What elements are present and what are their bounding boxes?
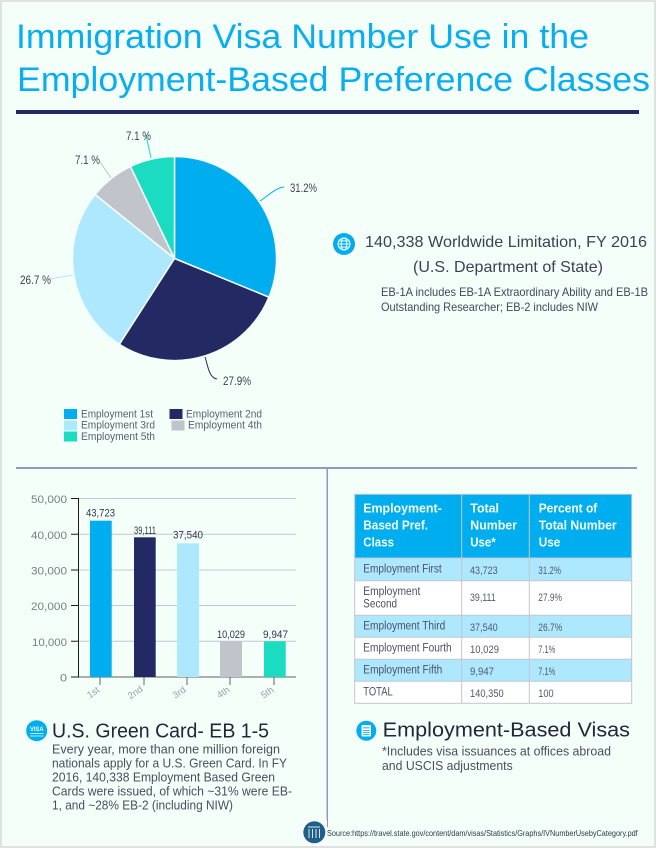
pie legend: [64, 408, 262, 443]
y axis labels: 50,000: [31, 494, 67, 506]
title: Employment-Based Preference Classes: [17, 61, 650, 99]
pie legend: Employment 3rd: [81, 420, 155, 432]
title: [16, 18, 650, 99]
table number column: 140,350: [470, 688, 504, 700]
y axis labels: [31, 494, 67, 684]
y axis labels: 20,000: [31, 601, 67, 613]
pie legend: Employment 5th: [81, 431, 155, 443]
table header: [355, 494, 632, 558]
slice: Employment 1st 31.2%: [174, 156, 277, 297]
pie value labels: 31.2%: [290, 181, 317, 195]
pie value labels: 27.9%: [223, 374, 251, 388]
gridlines and axes: [71, 498, 296, 685]
icon: visa card: [26, 720, 47, 741]
table class column: TOTAL: [363, 687, 393, 699]
table class column: Employment: [363, 586, 421, 598]
visas footnote: and USCIS adjustments: [382, 759, 513, 773]
visas footnote: [382, 745, 611, 773]
table header: Based Pref.: [363, 519, 428, 533]
icon: document: [356, 721, 376, 741]
table header: Total Number: [539, 519, 617, 533]
y axis labels: 30,000: [31, 566, 67, 578]
worldwide limitation heading: 140,338 Worldwide Limitation, FY 2016: [365, 234, 647, 251]
slice: Employment 2nd 27.9%: [119, 258, 269, 361]
slice: Employment 5th 7.1%: [130, 156, 174, 258]
bar value labels: 43,723: [86, 508, 115, 520]
green card body text: 1, and ~28% EB-2 (including NIW): [52, 798, 233, 812]
table class column: [363, 564, 452, 699]
bar chart: [31, 494, 296, 702]
x axis labels: 1st: [85, 685, 102, 701]
x axis labels: 5th: [259, 685, 276, 701]
worldwide limitation heading: (U.S. Department of State): [413, 259, 603, 276]
bars: [90, 521, 286, 677]
y axis labels: 0: [60, 672, 67, 684]
visas footnote: *Includes visa issuances at offices abroad: [382, 745, 611, 759]
x axis labels: 4th: [215, 685, 232, 701]
icon: globe: [332, 232, 356, 256]
table number column: 39,111: [470, 592, 496, 604]
slice: Employment 3rd 26.7%: [73, 194, 174, 344]
bar value labels: 39,111: [134, 525, 156, 537]
data table: [355, 494, 632, 703]
green card body text: Every year, more than one million foreign: [52, 742, 280, 756]
employment-based visas heading: Employment-Based Visas: [383, 720, 630, 742]
slice: Employment 4th 7.1%: [95, 166, 174, 258]
table header: Employment-: [363, 502, 442, 516]
pie value labels: 7.1 %: [75, 153, 100, 167]
table number column: 9,947: [470, 666, 494, 678]
table header: Total: [470, 502, 499, 516]
pie value labels: 26.7 %: [20, 273, 51, 287]
pie legend: Employment 4th: [188, 420, 262, 432]
table class column: Employment Fifth: [363, 665, 442, 677]
y axis labels: 10,000: [32, 637, 67, 649]
x axis labels: [85, 684, 276, 702]
table number column: [470, 565, 504, 700]
table row backgrounds: [355, 558, 632, 703]
table percent column: 7.1%: [538, 644, 555, 656]
y axis labels: 40,000: [31, 530, 67, 542]
table header: Class: [363, 536, 394, 550]
icon: visa card: VISA: [30, 726, 44, 733]
EB-1A note: [381, 285, 648, 314]
table header: Percent of: [539, 502, 598, 516]
worldwide limitation heading: [365, 234, 647, 276]
bar value labels: 10,029: [217, 629, 245, 641]
table percent column: 26.7%: [538, 622, 562, 634]
table header: Use*: [470, 536, 496, 550]
pie chart: [20, 129, 317, 388]
table number column: 43,723: [470, 565, 498, 577]
pie legend: Employment 1st: [81, 408, 153, 420]
bar value labels: 37,540: [173, 530, 203, 542]
pie value labels: 7.1 %: [126, 129, 151, 143]
x axis labels: 2nd: [126, 684, 145, 702]
table percent column: 31.2%: [538, 565, 561, 577]
leader lines: [50, 135, 284, 379]
green card body text: [52, 742, 292, 812]
table class column: Employment Fourth: [363, 643, 452, 655]
bar value labels: 9,947: [263, 629, 288, 641]
table percent column: 7.1%: [538, 666, 555, 678]
table number column: 37,540: [470, 622, 498, 634]
table percent column: [538, 565, 562, 700]
pie value labels: [20, 129, 317, 388]
green card body text: Cards were issued, of which ~31% were EB-: [52, 785, 292, 799]
table header: Use: [539, 536, 560, 550]
green card body text: 2016, 140,338 Employment Based Green: [52, 771, 275, 785]
icon: source logo: [302, 820, 327, 846]
table class column: Employment Third: [363, 621, 445, 633]
bar value labels: [86, 508, 288, 641]
green card heading: U.S. Green Card- EB 1-5: [52, 720, 269, 742]
green card body text: nationals apply for a U.S. Green Card. In FY: [52, 756, 288, 770]
table number column: 10,029: [470, 644, 499, 656]
x axis labels: 3rd: [171, 685, 188, 701]
table percent column: 27.9%: [538, 592, 562, 604]
EB-1A note: Outstanding Researcher; EB-2 includes NIW: [381, 300, 599, 314]
table class column: Second: [363, 599, 397, 611]
table class column: Employment First: [363, 564, 442, 576]
pie legend: Employment 2nd: [186, 408, 262, 420]
table percent column: 100: [538, 688, 554, 700]
title: Immigration Visa Number Use in the: [16, 18, 589, 56]
table header: Number: [470, 519, 517, 533]
